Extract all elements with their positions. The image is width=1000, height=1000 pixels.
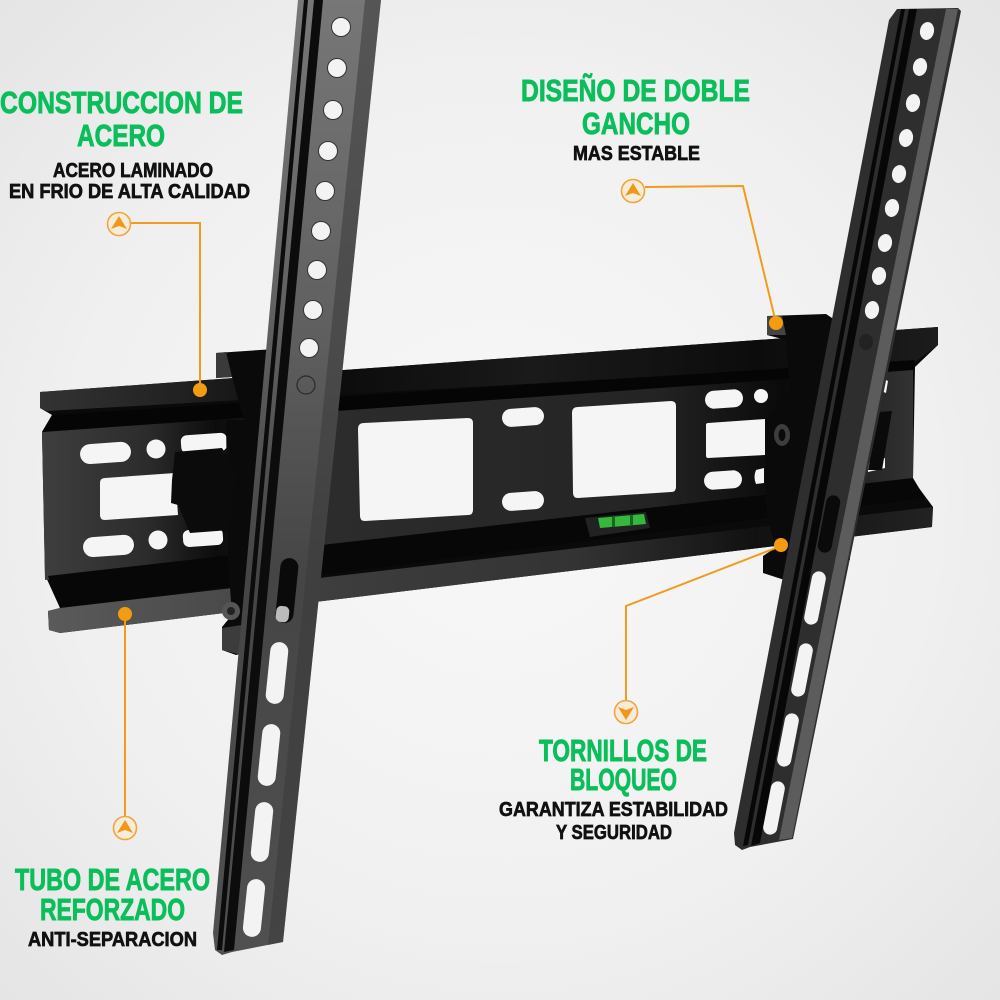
lower flange	[48, 507, 932, 633]
heading line 2: ACERO	[77, 118, 165, 153]
left arm embossed dot	[297, 376, 315, 394]
left lower bolt	[222, 602, 240, 620]
heading: TUBO DE ACERO	[15, 862, 210, 897]
anchor dot	[769, 316, 783, 330]
left arm dark slot	[275, 557, 299, 624]
icon: up arrow	[114, 816, 136, 840]
icon: up arrow	[622, 180, 644, 202]
icon: down arrow	[614, 700, 638, 724]
leader line	[645, 186, 776, 323]
lower channel	[48, 478, 925, 608]
description line 2: Y SEGURIDAD	[556, 822, 672, 844]
heading: TORNILLOS DE	[539, 733, 707, 768]
right bracket flap	[767, 316, 786, 335]
rail face	[42, 367, 913, 580]
description: ACERO LAMINADO	[53, 160, 213, 182]
leader line	[626, 546, 781, 700]
right arm embossed dot	[859, 334, 873, 350]
horizontal rail	[40, 327, 938, 633]
right side back plate detail	[868, 411, 892, 470]
left tilt knob	[171, 448, 236, 533]
heading: DISEÑO DE DOBLE	[521, 73, 750, 108]
left arm channel stripes	[217, 0, 308, 950]
right bracket mass	[763, 314, 850, 585]
left bracket flap	[216, 352, 232, 378]
right arm oblong holes	[762, 570, 827, 836]
upper channel	[42, 360, 915, 432]
right arm body	[734, 8, 961, 850]
description: GARANTIZA ESTABILIDAD	[499, 799, 728, 821]
left arm right bevel	[268, 0, 381, 945]
upper flange	[40, 327, 938, 411]
description: ANTI-SEPARACION	[28, 929, 197, 951]
heading line 2: BLOQUEO	[570, 762, 677, 797]
anchor dot	[774, 538, 788, 552]
large center openings	[358, 418, 473, 521]
callout: construccion de acero	[0, 85, 250, 397]
leader line	[131, 223, 200, 390]
right arm round holes	[863, 21, 936, 320]
left end holes	[79, 441, 132, 465]
anchor dot	[118, 607, 132, 621]
left vertical arm	[213, 0, 381, 955]
right arm channel stripes	[743, 9, 905, 846]
leader line	[124, 614, 126, 816]
left arm oblong holes	[242, 641, 289, 938]
callout: tornillos de bloqueo	[499, 538, 788, 844]
center slots	[501, 407, 545, 427]
rail holes	[79, 379, 888, 558]
right bolt	[774, 424, 790, 446]
bubble level	[585, 512, 650, 537]
callout: tubo de acero reforzado	[15, 607, 210, 951]
right end holes	[704, 389, 744, 409]
heading: CONSTRUCCION DE	[0, 85, 243, 120]
anchor dot	[193, 383, 207, 397]
left lower bracket tab	[222, 625, 246, 656]
heading line 2: GANCHO	[582, 106, 690, 141]
rail silhouette	[40, 327, 938, 633]
description line 2: EN FRIO DE ALTA CALIDAD	[9, 181, 250, 203]
callout: diseno de doble gancho	[521, 73, 783, 330]
left arm body	[213, 0, 381, 955]
right arm light bevel	[779, 9, 958, 840]
left bracket mass	[216, 348, 300, 655]
right arm dark slot	[817, 494, 841, 554]
icon: up arrow	[108, 212, 130, 236]
left arm round holes	[300, 18, 350, 358]
description: MAS ESTABLE	[573, 143, 700, 165]
heading line 2: REFORZADO	[40, 892, 185, 927]
right vertical arm	[734, 8, 961, 850]
